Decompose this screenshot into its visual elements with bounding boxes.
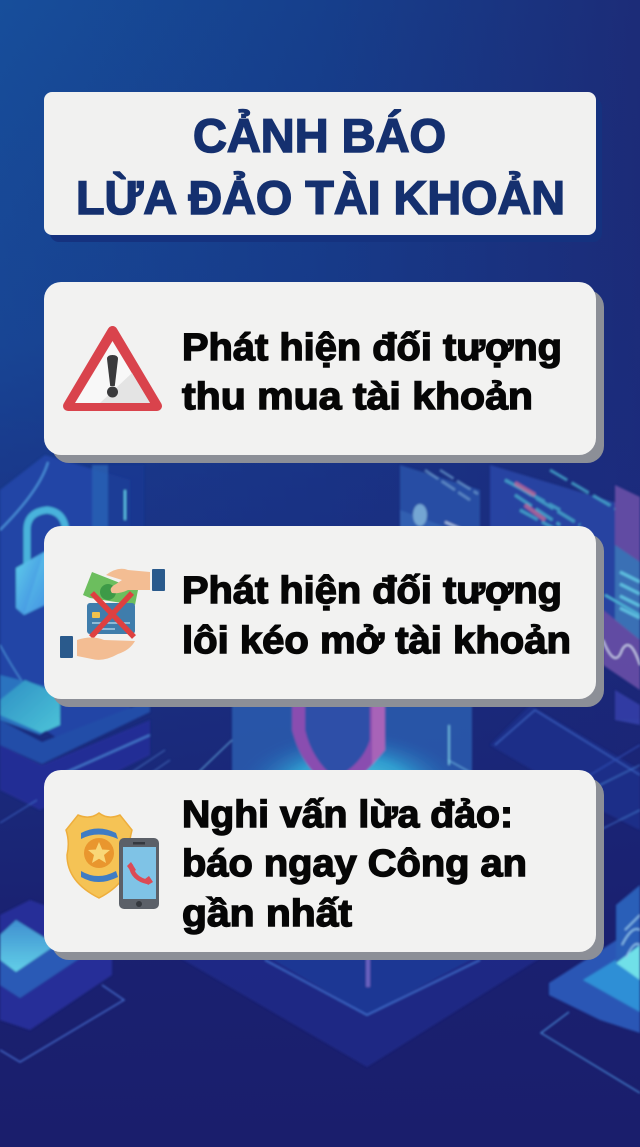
card 3 text: gần nhất xyxy=(182,893,352,935)
card 1 text: Phát hiện đối tượng xyxy=(182,327,562,369)
heading text xyxy=(76,109,565,224)
left shield panel with padlock xyxy=(0,455,144,740)
card 1: buying accounts xyxy=(44,282,604,463)
icon: warning triangle xyxy=(68,331,157,406)
left teal platform xyxy=(0,675,175,812)
heading text: LỪA ĐẢO TÀI KHOẢN xyxy=(76,171,565,224)
central lower diamond xyxy=(175,955,545,1067)
card 3 text: báo ngay Công an xyxy=(182,843,527,885)
icon: police badge and phone xyxy=(66,813,159,909)
card 3 text xyxy=(182,794,527,935)
background: cyber security illustration xyxy=(0,455,640,1093)
central shield and glow xyxy=(180,700,520,850)
card 2: luring to open accounts xyxy=(44,526,604,707)
card 2 text xyxy=(182,570,571,662)
lower right stack with fingerprint xyxy=(541,765,640,1093)
card 1 text xyxy=(182,327,562,418)
card 1 text: thu mua tài khoản xyxy=(182,376,533,418)
card 2 text: Phát hiện đối tượng xyxy=(182,570,562,612)
dashboard panels xyxy=(400,465,640,725)
card 3 text: Nghi vấn lừa đảo: xyxy=(182,794,513,836)
card 3: report to police xyxy=(44,770,604,960)
heading card xyxy=(44,92,602,242)
icon: money and card exchange crossed out xyxy=(60,569,165,660)
card 2 text: lôi kéo mở tài khoản xyxy=(182,620,571,662)
heading text: CẢNH BÁO xyxy=(193,109,446,162)
right dark platform xyxy=(470,705,640,830)
lower left stack xyxy=(0,800,124,1062)
